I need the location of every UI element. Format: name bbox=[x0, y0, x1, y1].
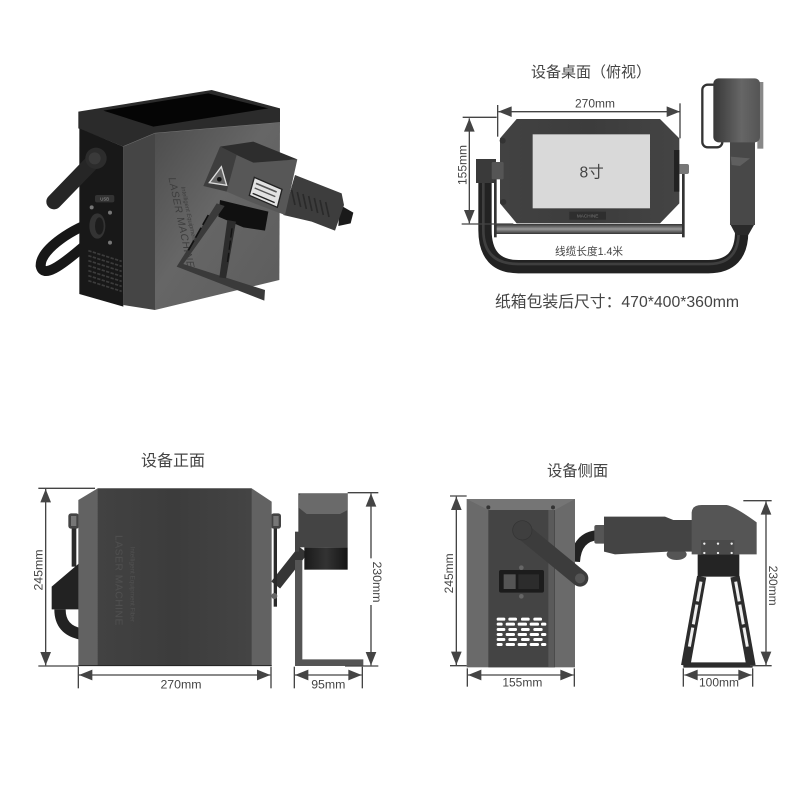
device front body bbox=[78, 488, 272, 666]
laser gun handle bbox=[594, 517, 692, 560]
right handle bbox=[271, 513, 303, 607]
laser gun handle bbox=[283, 175, 353, 231]
device top with screen bbox=[78, 90, 280, 147]
knobs bbox=[492, 138, 689, 205]
dimension: 155mm: 155mm bbox=[456, 145, 470, 185]
dimension: 270mm: 270mm bbox=[160, 677, 202, 691]
dimension: 100mm: 100mm bbox=[699, 675, 739, 689]
laser head bbox=[295, 493, 348, 570]
dimension: 270mm bbox=[498, 97, 680, 138]
packing size note: 纸箱包装后尺寸：470*400*360mm bbox=[495, 293, 739, 311]
dimension: 245mm: 245mm bbox=[442, 553, 456, 593]
printed text: Intelligent Equipment Fiber bbox=[128, 547, 135, 622]
diagram: top view bbox=[456, 78, 763, 267]
dimension: 270mm bbox=[78, 667, 271, 691]
dimension: 230mm: 230mm bbox=[766, 566, 780, 606]
gun handle bbox=[730, 142, 755, 235]
vent holes bbox=[497, 618, 546, 646]
lens tube bbox=[218, 200, 268, 231]
stand bar and arms bbox=[494, 173, 685, 237]
dimension: 245mm bbox=[31, 488, 95, 666]
dimension: 230mm: 230mm bbox=[370, 561, 384, 603]
cable bbox=[41, 222, 95, 271]
dimension: 100mm bbox=[683, 668, 753, 689]
warning triangle icon bbox=[209, 167, 227, 185]
stand legs bbox=[683, 577, 753, 666]
title: top view: 设备桌面（俯视） bbox=[531, 64, 651, 81]
front face printed text: LASER MACHINE bbox=[165, 177, 196, 268]
left handle and cable bbox=[52, 513, 81, 634]
handle loop bbox=[702, 85, 722, 147]
dimension: 95mm bbox=[294, 667, 362, 691]
diagram: front view bbox=[31, 488, 384, 691]
screen bbox=[533, 134, 650, 208]
device front face bbox=[155, 123, 280, 310]
dimension: 155mm: 155mm bbox=[502, 676, 542, 690]
brand plate: MACHINE bbox=[577, 213, 598, 218]
device top body bbox=[500, 119, 679, 223]
device side panel bbox=[79, 128, 123, 307]
stand frame bbox=[177, 203, 265, 301]
laser head bbox=[203, 142, 297, 215]
title: front view: 设备正面 bbox=[141, 452, 205, 470]
front face printed text: Intelligent Equipment bbox=[179, 187, 197, 242]
warning label bbox=[249, 177, 282, 207]
dimension: 230mm bbox=[743, 501, 780, 666]
laser head bbox=[713, 78, 763, 149]
cable length label: 线缆长度1.4米 bbox=[555, 245, 623, 258]
product photo: perspective view bbox=[41, 90, 353, 310]
power socket bbox=[499, 565, 544, 599]
dimension: 245mm bbox=[442, 496, 467, 666]
dimension: 155mm bbox=[456, 117, 513, 224]
dimension: 245mm: 245mm bbox=[31, 549, 45, 591]
side handle bbox=[54, 148, 107, 202]
brand plate bbox=[569, 212, 606, 220]
printed text bbox=[112, 535, 135, 626]
device chamfer face bbox=[123, 133, 155, 310]
cable bbox=[575, 535, 598, 562]
cable bbox=[476, 159, 742, 267]
USB port and connector bbox=[89, 195, 114, 245]
printed text: LASER MACHINE bbox=[112, 535, 123, 626]
L stand bbox=[295, 560, 363, 666]
dimension: 270mm: 270mm bbox=[575, 97, 615, 111]
dimension: 230mm bbox=[345, 493, 384, 666]
device side body bbox=[467, 499, 575, 667]
title: side view: 设备侧面 bbox=[547, 463, 608, 480]
screen: 8寸 bbox=[579, 163, 604, 181]
dimension: 155mm bbox=[467, 668, 574, 690]
diagram: side view bbox=[442, 496, 780, 690]
laser head bbox=[692, 505, 757, 577]
USB port and connector: USB bbox=[100, 196, 109, 201]
side handle bbox=[513, 521, 585, 583]
dimension: 95mm: 95mm bbox=[311, 677, 345, 691]
vent grid bbox=[88, 251, 122, 291]
